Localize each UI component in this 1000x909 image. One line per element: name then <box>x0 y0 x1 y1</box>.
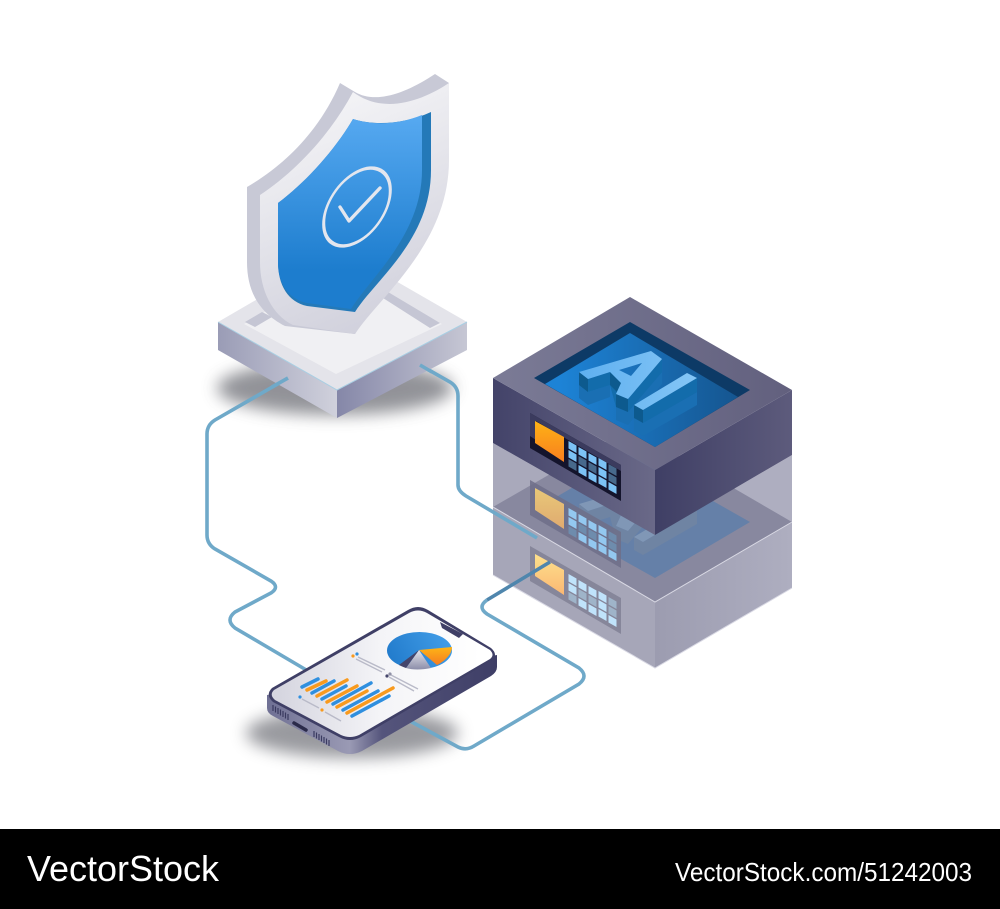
wire: plugged into server lower tier <box>487 562 550 600</box>
platform inner top <box>244 268 442 374</box>
footer bar <box>0 829 1000 909</box>
phone body <box>267 655 497 754</box>
shield blue edge <box>278 112 431 312</box>
window frame <box>534 322 750 447</box>
left vents <box>273 705 288 720</box>
charge port <box>294 723 306 730</box>
wire: phone to server <box>410 600 584 749</box>
shield blue face <box>278 115 422 309</box>
platform left face <box>218 322 337 418</box>
platform right slot <box>383 292 440 328</box>
platform right face <box>337 322 467 418</box>
window screen <box>545 333 738 447</box>
lower tier right face <box>655 522 792 668</box>
top box right face <box>655 390 792 535</box>
wire: shield to server <box>420 365 537 538</box>
chart legend lines <box>302 657 418 721</box>
top box left face <box>493 378 655 535</box>
AI letters top <box>579 351 697 410</box>
reflected AI letters <box>579 483 697 542</box>
AI letter depth <box>579 359 697 423</box>
AI letter dark sides <box>579 372 643 423</box>
reflected window <box>534 454 750 578</box>
footer brand: VectorStock <box>27 848 220 889</box>
top box top face <box>493 297 792 470</box>
wire stubs on platform <box>272 365 432 387</box>
upper glass right face <box>655 455 792 602</box>
phone notch <box>440 622 463 638</box>
right vents <box>314 731 329 746</box>
server stack <box>420 297 792 668</box>
pie chart <box>387 632 452 670</box>
glass mid plane <box>493 428 792 602</box>
chart legend dots <box>298 652 392 712</box>
platform edge highlight <box>218 322 467 390</box>
control panel <box>530 413 621 501</box>
wire: shield to phone <box>207 378 308 671</box>
platform left slot <box>245 312 272 327</box>
shadow: under phone <box>246 708 458 758</box>
lower tier left face <box>493 507 655 668</box>
platform top <box>218 250 467 390</box>
footer image id: VectorStock.com/51242003 <box>675 857 972 887</box>
bar chart <box>302 679 393 716</box>
reflected panel on mid plane <box>530 480 621 568</box>
upper glass left face <box>493 443 655 602</box>
icon: check circle <box>324 155 390 259</box>
shield front face <box>260 83 449 334</box>
glass edge highlights <box>493 507 792 668</box>
shield <box>247 74 449 334</box>
shield side face <box>247 74 449 334</box>
shadow: under platform <box>217 361 453 415</box>
phone <box>267 607 497 754</box>
reflected panel on lower tier <box>530 546 621 634</box>
phone top bezel <box>269 607 495 740</box>
platform <box>218 250 467 418</box>
AI letter lower extrusion <box>579 372 697 436</box>
phone screen <box>272 610 492 737</box>
reflected AI letter depth <box>579 491 697 555</box>
